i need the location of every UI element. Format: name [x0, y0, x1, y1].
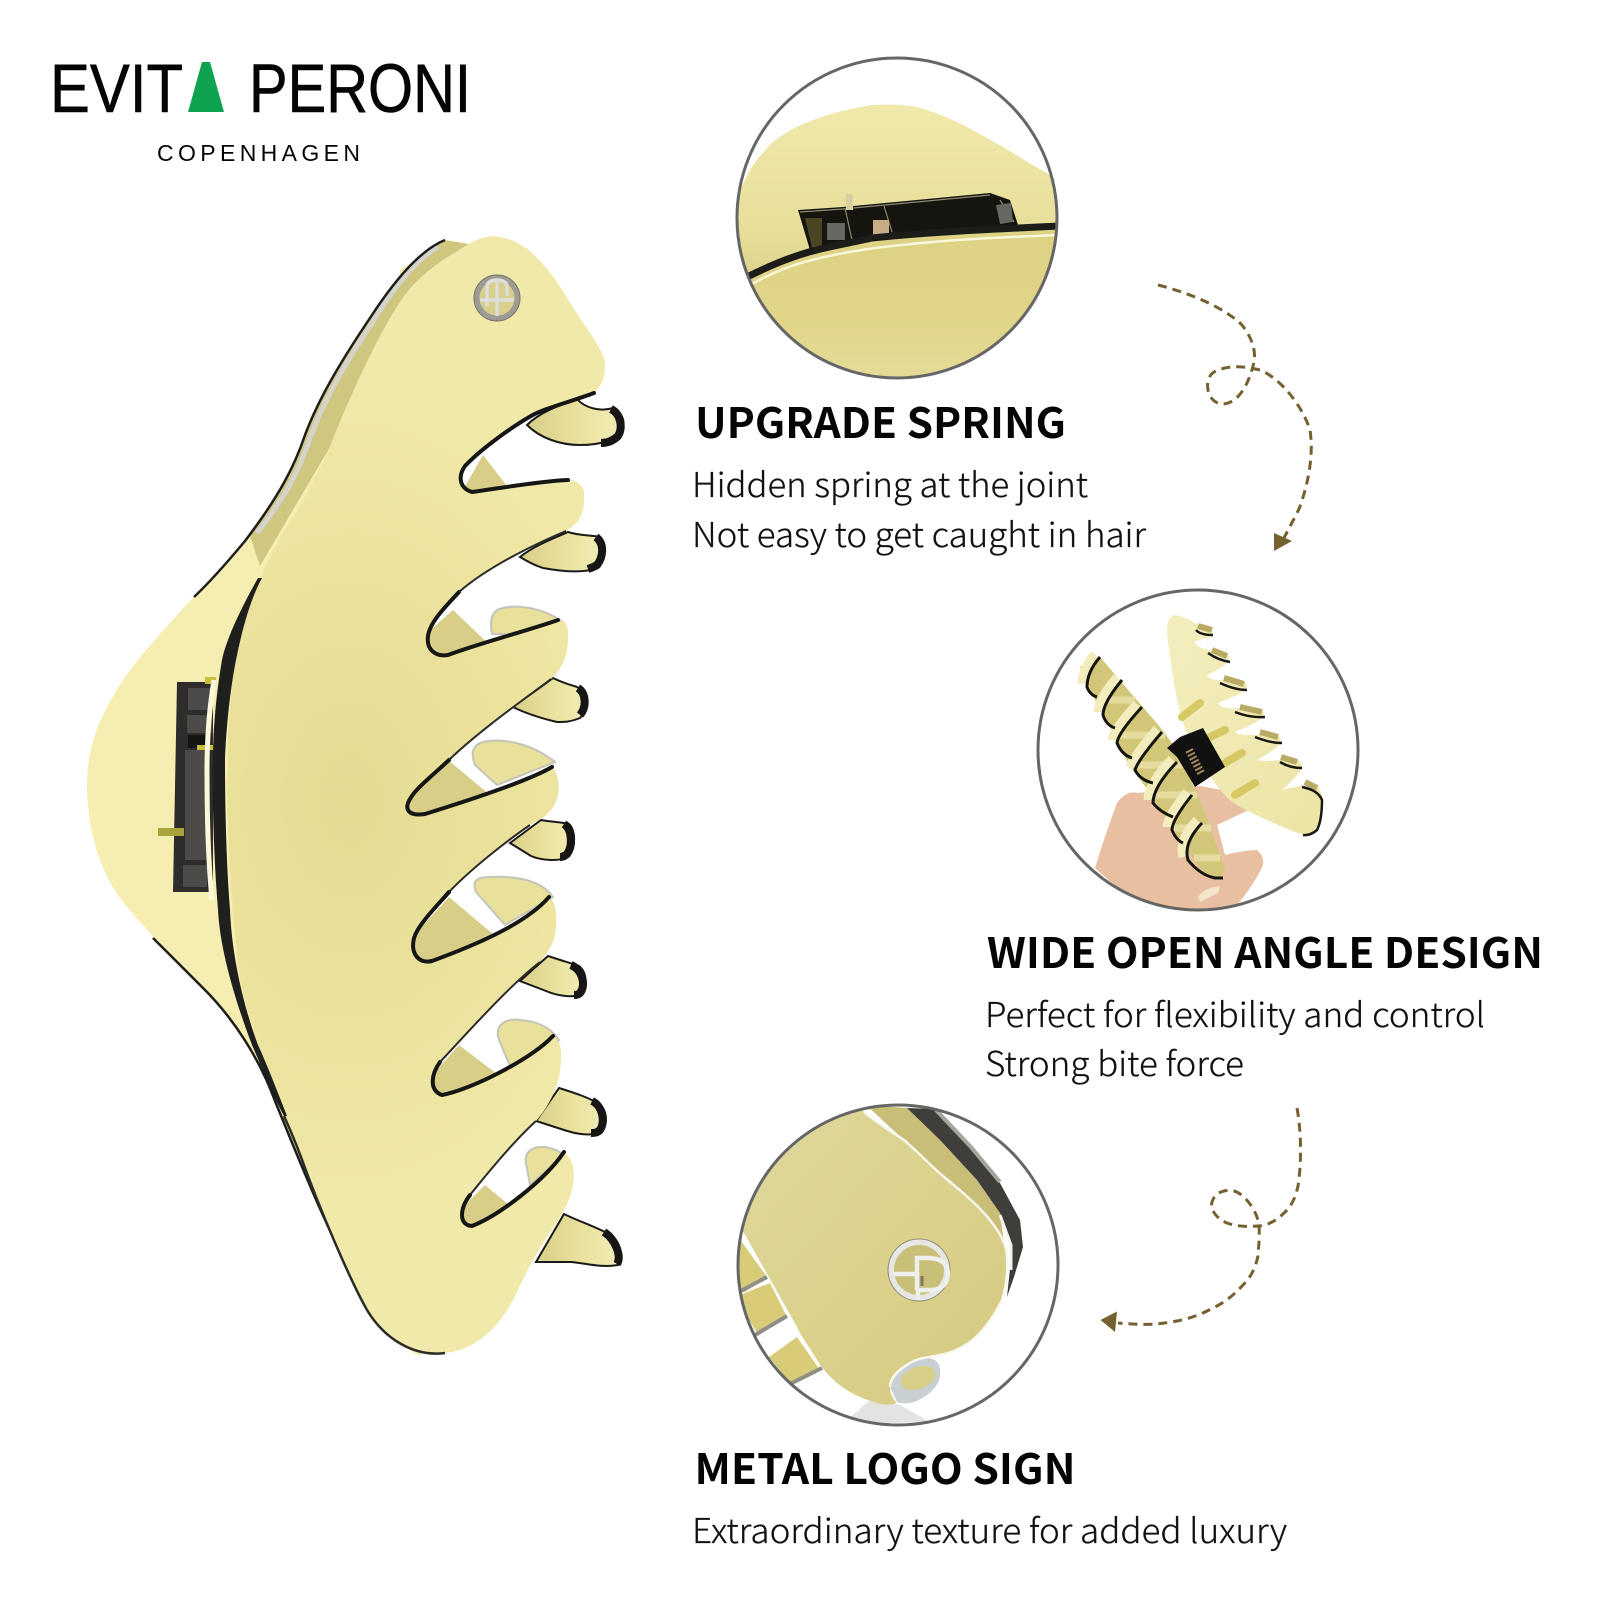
spring dark gap	[188, 735, 210, 748]
hand	[1095, 786, 1264, 908]
spring coil	[873, 220, 889, 235]
spring block top highlight	[800, 195, 1014, 240]
badge monogram	[480, 280, 514, 316]
hook slot 6	[526, 1147, 564, 1185]
logo photo crop	[730, 1100, 1023, 1424]
brand logo	[50, 50, 471, 166]
main product: hair claw clip	[87, 236, 624, 1356]
logo monogram	[893, 1258, 948, 1300]
metal logo	[888, 1239, 950, 1301]
shadow below clip	[852, 1400, 928, 1423]
tooth 5	[520, 956, 586, 996]
front shell	[227, 236, 605, 1354]
spring block	[798, 193, 1018, 250]
tooth olive tops	[1198, 626, 1317, 788]
badge inner ring highlight	[474, 275, 520, 321]
white line next to seam	[207, 680, 214, 900]
left wing olive band	[1080, 657, 1225, 878]
central black seam	[213, 578, 287, 1116]
text: upgrade spring description: Not easy to get caught in hair	[692, 508, 1147, 557]
back shell upper highlight	[257, 247, 438, 533]
tooth black lines	[1196, 630, 1322, 835]
hooks curling inside slots	[473, 607, 564, 1185]
fingernail	[1198, 887, 1220, 902]
open clip photo crop	[1080, 615, 1322, 925]
detail circle: wide open angle	[1038, 590, 1358, 925]
metal logo badge	[474, 275, 520, 321]
spring pin	[158, 828, 184, 836]
black tooth tips	[560, 409, 621, 1264]
upper shell	[738, 104, 1056, 272]
silver edge	[936, 1110, 1000, 1182]
white edge highlight	[1000, 1215, 1011, 1270]
spring reflections	[827, 203, 1013, 240]
front olive body	[730, 1100, 1007, 1404]
left wing black rib lines	[1087, 657, 1223, 878]
logo wordmark left: EVIT	[50, 50, 183, 127]
tooth 3	[513, 678, 586, 722]
logo monogram shade	[920, 1276, 924, 1286]
circle outline	[737, 58, 1057, 378]
back teeth olive stripes	[735, 1238, 820, 1383]
back shell upper band	[250, 240, 469, 566]
tooth 6	[536, 1088, 606, 1134]
text: upgrade spring description: Hidden spring at the joint	[692, 458, 1088, 507]
black slot outlines	[407, 393, 594, 1226]
right wing of clip	[1167, 615, 1322, 835]
tooth 4	[510, 820, 574, 860]
tooth 2	[520, 532, 604, 571]
spring coil	[1189, 750, 1201, 773]
hook slot 2	[491, 607, 563, 635]
thin upper slot edges	[440, 531, 566, 1195]
logo green triangle	[188, 62, 224, 112]
detail circle: spring	[730, 58, 1060, 380]
dashed arrow 2	[1100, 1108, 1301, 1332]
logo subtitle: COPENHAGEN	[157, 140, 360, 166]
spring block	[1167, 728, 1225, 787]
logo wordmark right: PERONI	[249, 50, 471, 127]
back shell dark edge	[153, 240, 445, 1264]
metallic tooth lines	[737, 1277, 822, 1384]
hook slot 4	[474, 877, 553, 925]
seam highlight	[750, 235, 1060, 285]
spring gold accents	[197, 677, 216, 750]
hook slot 5	[498, 1020, 559, 1066]
text: wide open angle description: Strong bite force	[985, 1037, 1244, 1086]
heading: upgrade spring: UPGRADE SPRING	[695, 390, 1066, 451]
spring cells	[183, 688, 213, 887]
olive band	[870, 1106, 1004, 1240]
dark grey band	[907, 1108, 1023, 1297]
circle outline	[1038, 590, 1358, 910]
black seam	[745, 226, 1060, 278]
circle outline	[738, 1105, 1058, 1425]
detail circle: metal logo	[730, 1100, 1058, 1425]
left wing lighter stripes	[1100, 700, 1220, 858]
loop tooth	[890, 1358, 940, 1403]
badge outer ring	[477, 278, 517, 318]
dashed arrow 1	[1158, 285, 1311, 551]
front white edge	[864, 1112, 1007, 1387]
lower shell	[762, 230, 1055, 376]
back shell of clip	[87, 240, 445, 1356]
logo ring	[891, 1242, 947, 1298]
spring pin	[846, 194, 853, 210]
text: wide open angle description	[985, 988, 1485, 1086]
teeth behind front shell	[510, 399, 624, 1266]
heading: metal logo sign: METAL LOGO SIGN	[694, 1436, 1076, 1497]
spring gold accent	[805, 218, 822, 248]
hook slot 3	[473, 741, 555, 785]
logo ring shade	[888, 1239, 950, 1301]
tooth 1	[527, 399, 624, 445]
tooth 7	[536, 1214, 621, 1266]
spring hardware	[158, 677, 216, 900]
slot inner wedges	[405, 455, 515, 1235]
right wing shadow bars	[1182, 703, 1255, 795]
spring housing	[173, 682, 213, 892]
text: wide open angle description: Perfect for flexibility and control	[985, 988, 1485, 1037]
heading: wide open angle design: WIDE OPEN ANGLE DESIGN	[987, 920, 1543, 981]
spring photo crop	[730, 105, 1060, 380]
text: upgrade spring description	[692, 458, 1147, 557]
text: metal logo description: Extraordinary texture for added luxury	[692, 1504, 1287, 1553]
front shell lower outer edge	[284, 1116, 445, 1354]
left wing cream ribs	[1082, 654, 1197, 857]
loop inner	[900, 1366, 936, 1390]
